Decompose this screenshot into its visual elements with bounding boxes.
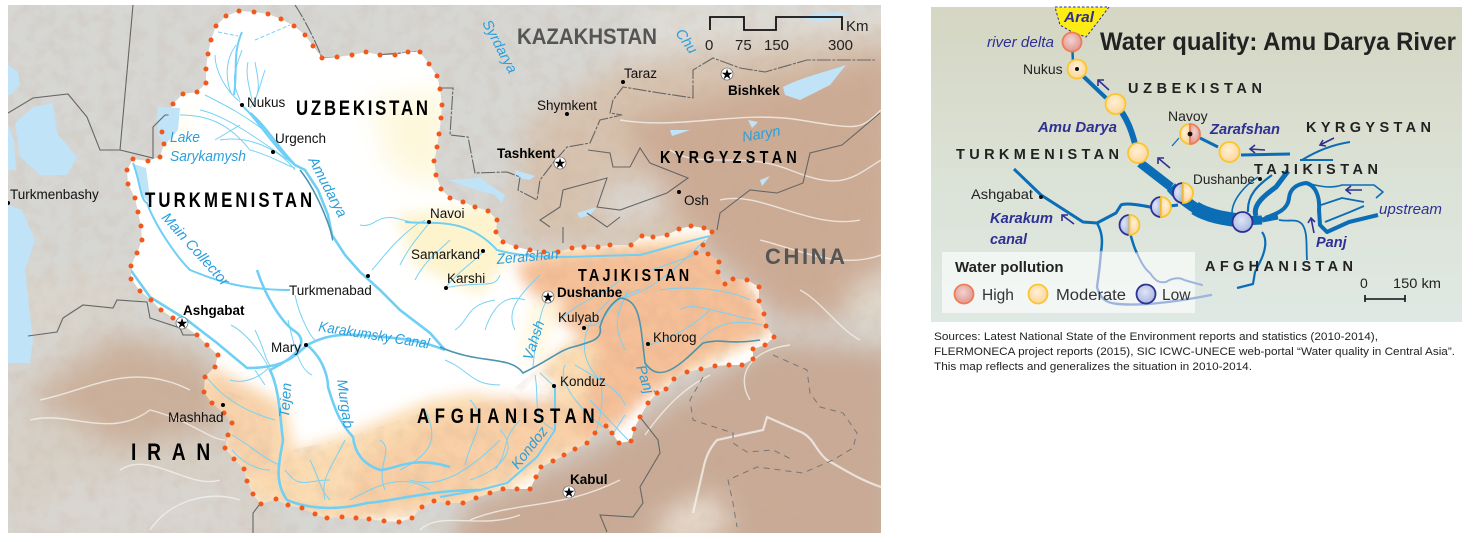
river and lake labels: Vahsh — [521, 319, 548, 362]
scale bar in kilometres — [705, 17, 868, 54]
pollution sample markers — [1039, 32, 1262, 235]
city labels: Taraz — [624, 66, 657, 81]
river and lake labels: Amudarya — [304, 153, 350, 220]
country labels: KAZAKHSTAN — [517, 24, 657, 49]
lakes inside the basin — [134, 107, 180, 205]
country labels: TURKMENISTAN — [145, 189, 312, 213]
national borders — [8, 5, 880, 533]
place names and country labels: canal — [990, 232, 1028, 248]
river and lake labels: Panj — [632, 363, 657, 397]
river and lake labels: Zerafshan — [495, 247, 559, 268]
capital city star markers: ★ — [563, 484, 575, 500]
flow direction arrows — [1062, 80, 1362, 233]
country labels — [131, 24, 845, 466]
country labels: UZBEKISTAN — [296, 97, 428, 121]
river and lake labels — [158, 17, 782, 472]
sources note: Sources: Latest National State of the Environment reports and statistics (2010-2014), — [934, 331, 1378, 343]
city labels: Urgench — [275, 131, 326, 146]
river and lake labels: Kondoz — [509, 423, 552, 472]
place names and country labels: Ashgabat — [971, 186, 1033, 202]
city labels: Mashhad — [168, 410, 224, 425]
place names and country labels: Dushanbe — [1193, 171, 1255, 187]
basin area — [127, 11, 772, 522]
city labels: Kulyab — [558, 310, 599, 325]
city labels: Karshi — [447, 271, 485, 286]
sources note: This map reflects and generalizes the situation in 2010-2014. — [934, 361, 1252, 373]
panel: terrain map of the Amu Darya basin — [6, 0, 900, 542]
city labels: Ashgabat — [183, 303, 245, 318]
capital city star markers: ★ — [542, 289, 554, 305]
rivers of the basin — [180, 10, 762, 500]
legend: water pollution: High — [982, 287, 1014, 304]
city labels: Nukus — [247, 95, 286, 110]
place names and country labels: river delta — [987, 35, 1054, 51]
place names and country labels: Aral — [1063, 10, 1095, 26]
city labels: Samarkand — [411, 247, 480, 262]
place names and country labels: TAJIKISTAN — [1254, 162, 1378, 178]
river and lake labels: Main Collector — [158, 210, 233, 290]
place names and country labels: Navoy — [1168, 108, 1208, 124]
Aral sea — [1055, 7, 1109, 37]
panel scale bar — [1360, 275, 1441, 302]
city labels: Kabul — [570, 472, 608, 487]
country labels: TAJIKISTAN — [578, 266, 689, 285]
river and lake labels: Sarykamysh — [170, 149, 246, 165]
panel scale bar: 150 km — [1393, 275, 1441, 291]
city labels: Dushanbe — [557, 285, 623, 300]
city labels: Turkmenabad — [289, 283, 372, 298]
panel: water quality of the Amu Darya — [931, 7, 1462, 322]
legend: water pollution — [954, 259, 1191, 304]
panel scale bar: 0 — [1360, 275, 1368, 291]
place names and country labels: Zarafshan — [1209, 122, 1280, 138]
legend: water pollution: Water pollution — [955, 259, 1064, 276]
scale bar in kilometres: 75 — [735, 37, 752, 54]
scale bar in kilometres: 300 — [828, 37, 853, 54]
city labels: Navoi — [430, 206, 465, 221]
place names and country labels — [956, 10, 1442, 275]
capital city star markers: ★ — [721, 66, 733, 82]
river and lake labels: Tejen — [277, 382, 295, 418]
place names and country labels: upstream — [1379, 201, 1442, 218]
city labels: Osh — [684, 193, 709, 208]
place names and country labels: Panj — [1316, 235, 1348, 251]
river and lake labels: Naryn — [741, 123, 782, 146]
country labels: AFGHANISTAN — [417, 405, 595, 429]
country labels: KYRGYZSTAN — [660, 148, 797, 167]
sources note — [934, 331, 1455, 373]
scale bar in kilometres: 150 — [764, 37, 789, 54]
river and lake labels: Lake — [170, 130, 200, 146]
place names and country labels: Amu Darya — [1037, 120, 1117, 136]
place names and country labels: Nukus — [1023, 61, 1063, 77]
river and lake labels: Karakumsky Canal — [317, 319, 431, 353]
capital city star markers: ★ — [176, 315, 188, 331]
river and lake labels: Murgab — [333, 378, 356, 429]
river and lake labels: Syrdarya — [478, 17, 520, 76]
scale bar in kilometres: 0 — [705, 37, 713, 54]
place names and country labels: UZBEKISTAN — [1128, 81, 1262, 97]
faded rivers behind the legend — [1097, 252, 1211, 305]
water bodies outside the basin — [8, 12, 850, 363]
sources note: FLERMONECA project reports (2015), SIC ICWC-UNECE web-portal “Water quality in Central Asia”. — [934, 346, 1455, 358]
country labels: IRAN — [131, 438, 210, 466]
capital city star markers — [176, 66, 733, 500]
city labels: Turkmenbashy — [10, 187, 99, 202]
legend: water pollution: Low — [1162, 287, 1191, 304]
country labels: CHINA — [765, 244, 845, 269]
city labels: Shymkent — [537, 98, 597, 113]
city labels — [10, 66, 780, 487]
city markers — [6, 80, 681, 407]
capital city star markers: ★ — [554, 155, 566, 171]
city labels: Tashkent — [497, 146, 556, 161]
terrain background — [8, 0, 900, 542]
place names and country labels: AFGHANISTAN — [1205, 259, 1353, 275]
city labels: Bishkek — [728, 83, 780, 98]
legend: water pollution: Moderate — [1056, 287, 1126, 304]
river continuing east of Amudarya — [300, 170, 760, 373]
terrain valleys — [30, 110, 881, 530]
river network — [1014, 42, 1383, 288]
place names and country labels: Karakum — [990, 211, 1053, 227]
city labels: Mary — [271, 340, 301, 355]
basin dotted boundary — [127, 11, 774, 522]
river and lake labels: Chu — [672, 26, 700, 57]
city labels: Konduz — [560, 374, 606, 389]
legend box background — [942, 252, 1195, 313]
panel background — [931, 7, 1462, 322]
scale bar in kilometres: Km — [846, 18, 868, 35]
city labels: Khorog — [653, 330, 697, 345]
place names and country labels: KYRGYSTAN — [1306, 120, 1431, 136]
place names and country labels: TURKMENISTAN — [956, 147, 1119, 163]
panel title: Water quality: Amu Darya River — [1100, 28, 1456, 56]
